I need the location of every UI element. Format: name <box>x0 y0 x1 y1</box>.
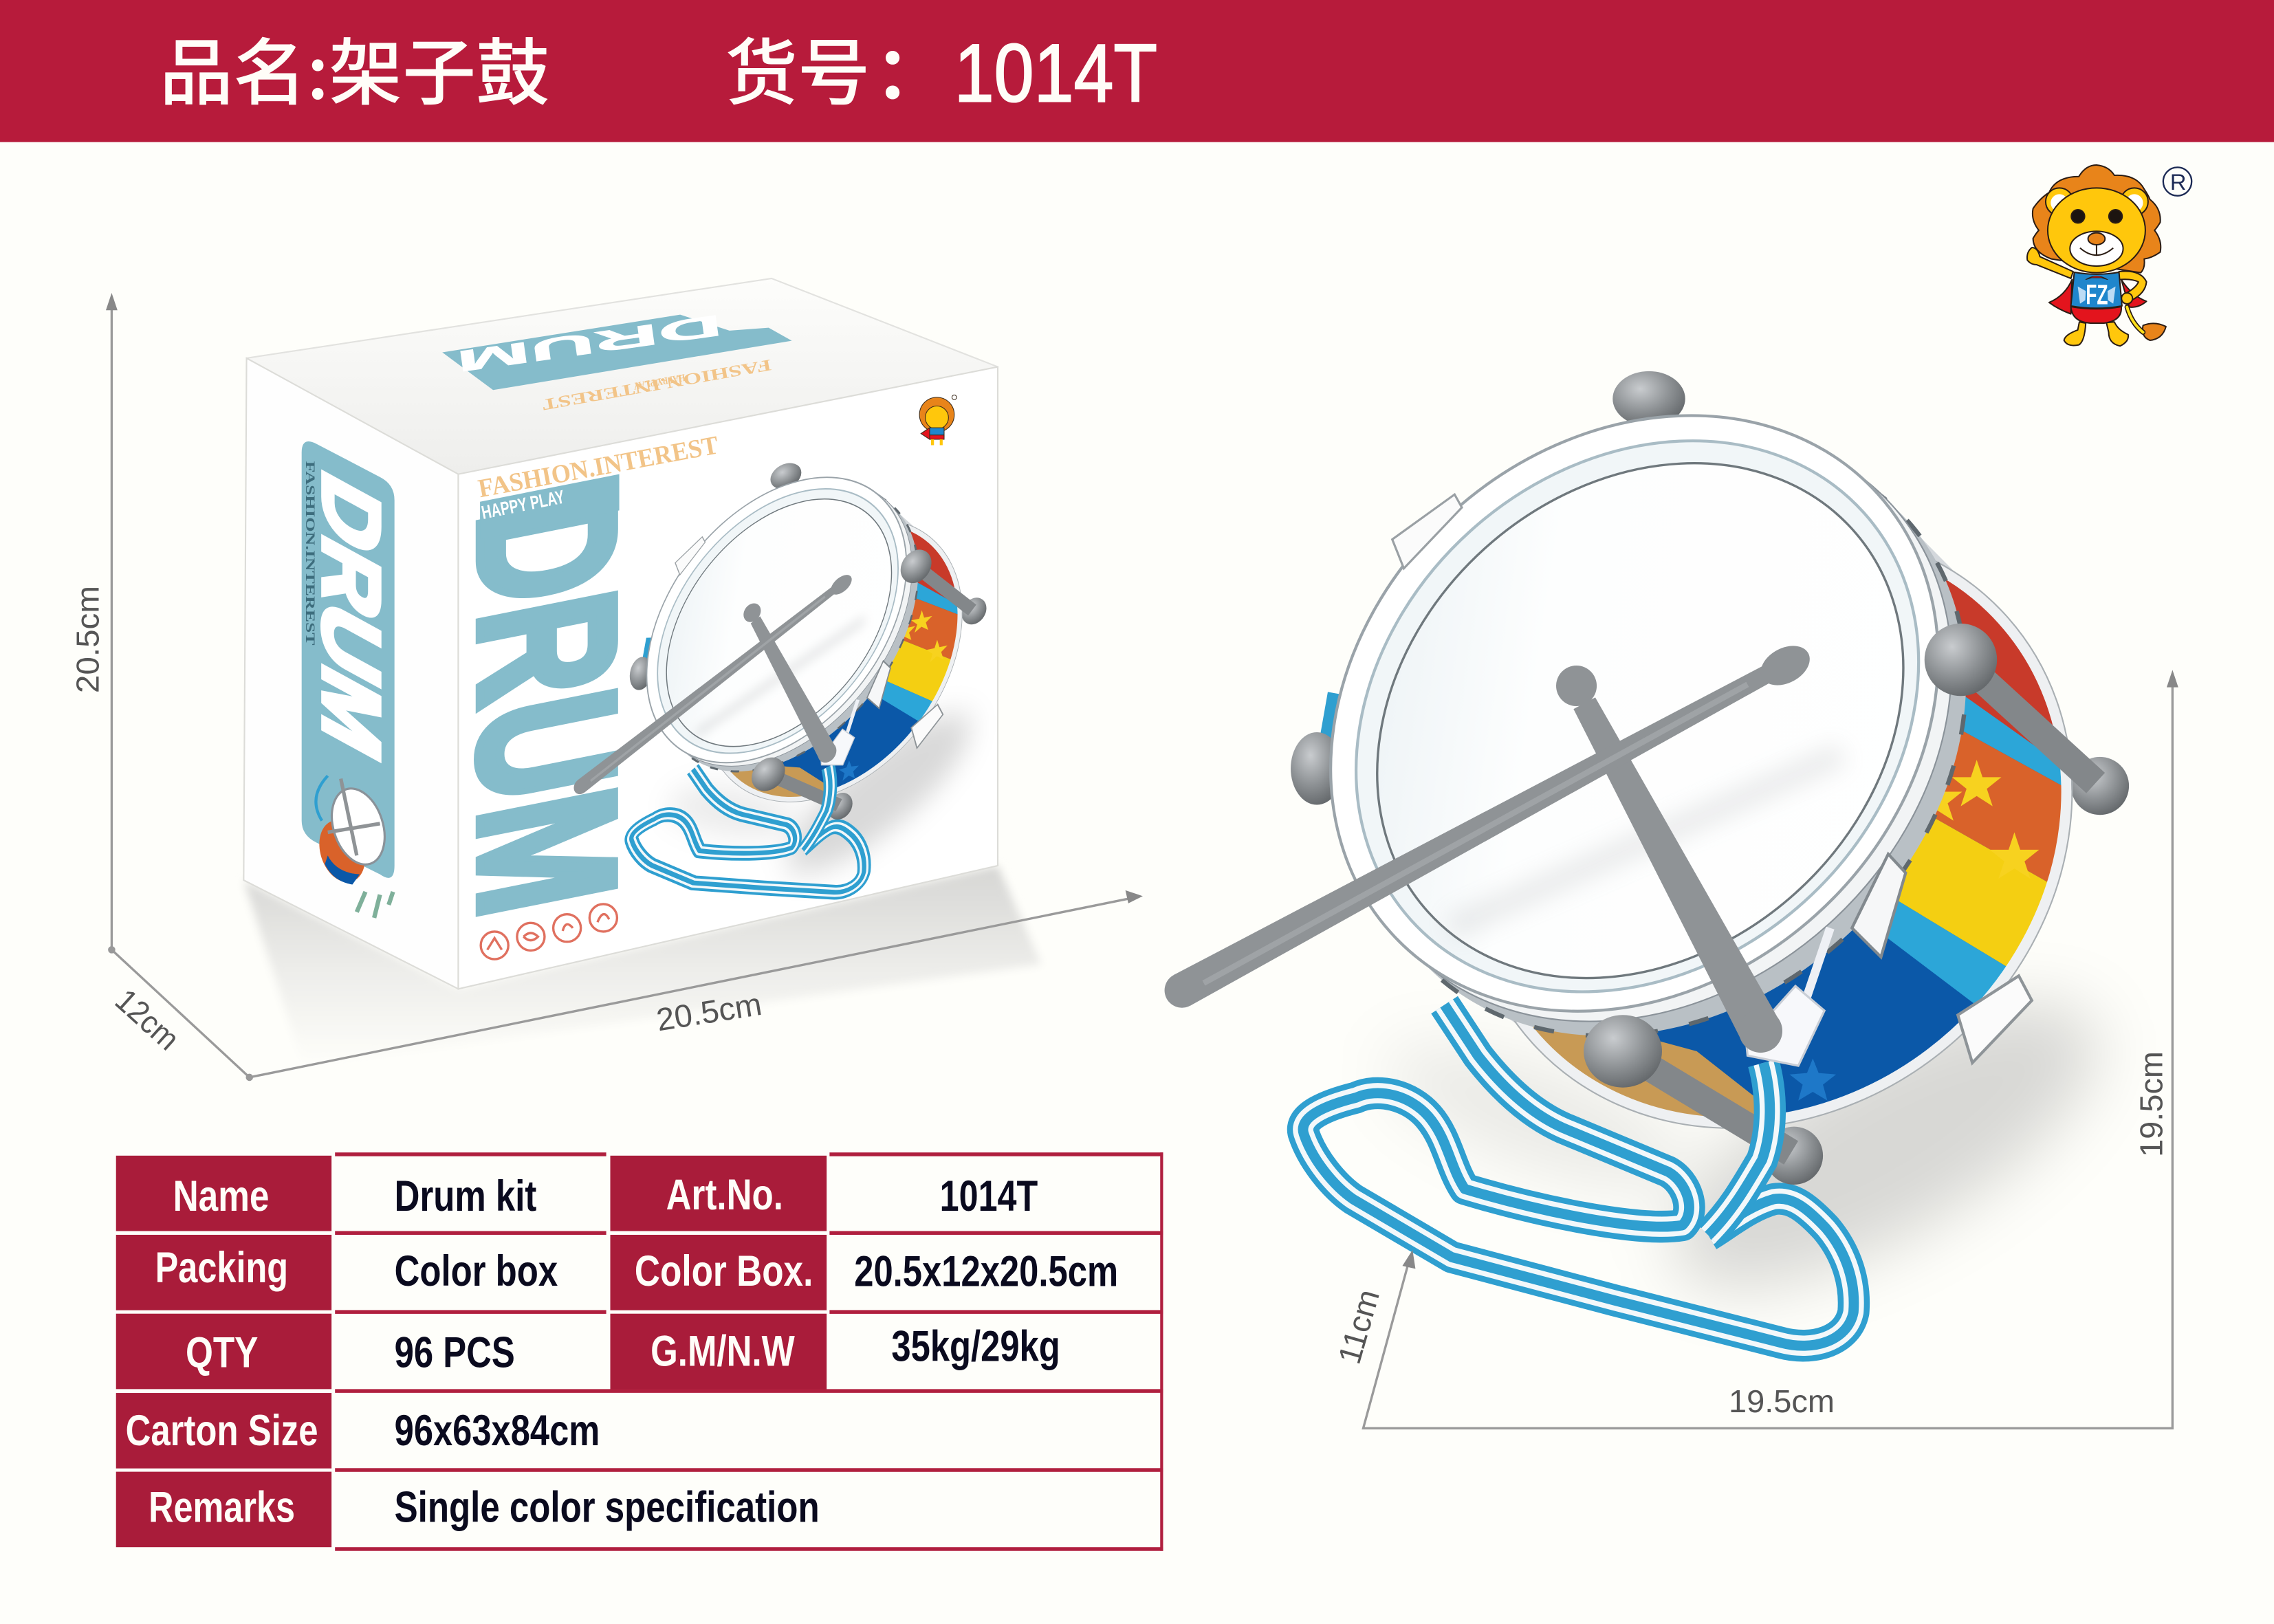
row: packing: 20.5x12x20.5cm <box>854 1248 1118 1296</box>
shell colour bands <box>1508 435 2146 1160</box>
row: carton size: 96x63x84cm <box>395 1407 600 1455</box>
box text: fashion interest: FASHION.INTEREST <box>476 430 721 503</box>
row: quantity <box>186 1322 1060 1377</box>
row: quantity: 35kg/29kg <box>891 1322 1060 1370</box>
lower left lug ball <box>1584 1015 1662 1088</box>
box top face <box>247 278 998 474</box>
drum illustration <box>1165 293 2195 1346</box>
row: carton size <box>126 1407 600 1455</box>
header band <box>0 0 2274 142</box>
heading: item number: 1014T <box>954 28 1157 120</box>
panel: product box <box>243 278 1019 989</box>
row: remarks: Single color specification <box>395 1484 820 1532</box>
drumstick 2 <box>1556 666 1782 1053</box>
label: drum depth: 11cm <box>1331 1286 1386 1368</box>
box top face: HAPPY PLAY <box>633 371 686 391</box>
label: box height: 20.5cm <box>69 586 105 693</box>
lug balls behind head <box>1291 371 2129 1185</box>
icon: small lion on box <box>919 395 956 445</box>
icon: lion mascot logo <box>2027 165 2191 346</box>
strap clip <box>1746 928 1830 1066</box>
icon: lion mascot logo: R <box>2170 169 2186 195</box>
heading: product name: 品名:架子鼓 <box>160 15 549 120</box>
small strap piece at left lug <box>1326 693 1334 743</box>
bottom-right bracket <box>1958 976 2032 1063</box>
row: remarks: Remarks <box>149 1484 295 1532</box>
row: name: Name <box>173 1172 269 1220</box>
box floor shadow <box>243 866 1041 1066</box>
box left face: DRUM <box>306 457 397 776</box>
drum shell <box>1344 407 2195 1252</box>
icon: lion mascot logo: FZ <box>2086 279 2108 311</box>
label: drum width: 19.5cm <box>1729 1383 1835 1419</box>
row: carton size: Carton Size <box>126 1407 318 1455</box>
upper-left bracket <box>1392 494 1462 569</box>
row: remarks <box>149 1484 820 1532</box>
upper right lug ball <box>1925 624 1997 696</box>
stick shadows on membrane <box>1450 754 1842 928</box>
drumstick 1 <box>1165 638 1817 1008</box>
box front face <box>439 367 1019 989</box>
dimension: box height, depth, width <box>69 293 1143 1081</box>
front strap strand <box>1708 1063 1770 1236</box>
row: name: Drum kit <box>395 1172 536 1220</box>
row: packing: Color box <box>395 1247 558 1295</box>
box text: happy play: HAPPY PLAY <box>479 486 566 523</box>
row: quantity: QTY <box>186 1329 258 1377</box>
box top face: FASHION.INTEREST <box>540 355 772 413</box>
heading: colon: ： <box>875 15 947 120</box>
row: packing <box>155 1244 1118 1296</box>
side bracket <box>1852 854 1905 957</box>
row: quantity: 96 PCS <box>395 1329 515 1377</box>
box top face: DRUM <box>454 308 725 378</box>
box left face: FASHION.INTEREST <box>303 461 317 646</box>
drum ground shadow <box>1370 948 2138 1343</box>
label: drum height: 19.5cm <box>2134 1051 2169 1157</box>
row: name: 1014T <box>940 1172 1038 1220</box>
box icons: four senses <box>481 904 617 959</box>
box drum image <box>570 379 1019 949</box>
dimension: drum depth, width, height <box>1331 670 2178 1428</box>
row: quantity: G.M/N.W <box>651 1328 795 1376</box>
row: packing: Color Box. <box>635 1247 813 1295</box>
table rules <box>335 1152 1163 1551</box>
lower rod <box>1623 1051 1791 1153</box>
row: name <box>173 1171 1038 1220</box>
strap loop <box>1303 1005 1854 1346</box>
specification table <box>116 1152 1163 1551</box>
chrome drum head <box>1210 293 2086 1158</box>
label: box width: 20.5cm <box>654 986 764 1038</box>
table label cells <box>116 1156 827 1547</box>
heading: item label: 货号 <box>725 15 870 120</box>
row: name: Art.No. <box>666 1171 783 1219</box>
box text: big DRUM: DRUM <box>439 479 655 930</box>
box left face <box>243 358 458 989</box>
box teal cap <box>480 474 620 540</box>
row: packing: Packing <box>155 1244 288 1292</box>
right rod <box>1960 660 2096 783</box>
label: box depth: 12cm <box>109 982 186 1057</box>
